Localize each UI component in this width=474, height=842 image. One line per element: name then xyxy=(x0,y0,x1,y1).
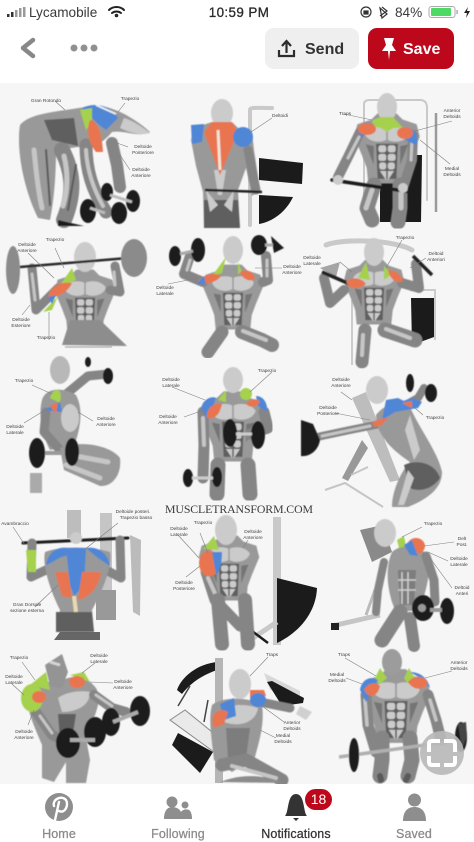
labels: Gran Dorsale xyxy=(13,602,42,608)
labels: Post. xyxy=(457,542,467,548)
labels: Trapezio xyxy=(424,521,443,527)
labels: Laterale xyxy=(156,291,174,297)
icon: cellular signal xyxy=(7,7,26,17)
labels: Deltoide xyxy=(332,377,350,383)
labels xyxy=(402,521,470,597)
labels: Anteriore xyxy=(158,420,178,426)
labels: Trapezio xyxy=(10,655,29,661)
labels: Esteriore xyxy=(11,323,31,329)
labels: Deltoids xyxy=(328,678,346,684)
labels: Posteriore xyxy=(132,150,154,156)
tab: home xyxy=(42,793,76,841)
machine xyxy=(320,241,435,365)
icon: pin xyxy=(382,38,396,60)
bench xyxy=(325,392,400,507)
labels: Trapezio xyxy=(37,335,56,341)
labels xyxy=(5,653,133,741)
label: Saved xyxy=(396,827,432,841)
exercise 9: incline rear raise xyxy=(301,374,445,507)
labels: Medial xyxy=(445,166,459,172)
labels: Deltoide xyxy=(12,317,30,323)
labels: Posteriore xyxy=(317,411,339,417)
clock: 10:59 PM xyxy=(209,5,269,20)
labels: Anteri xyxy=(456,591,468,597)
machine xyxy=(364,100,436,222)
labels: Delt xyxy=(458,536,467,542)
label: Deltoidi xyxy=(272,113,288,119)
labels: Trapezio xyxy=(258,368,277,374)
labels: Deltoide xyxy=(90,653,108,659)
labels: Medial xyxy=(330,672,344,678)
labels: Deltoide xyxy=(162,377,180,383)
icon: battery xyxy=(429,6,458,18)
labels: Anteriore xyxy=(113,685,133,691)
bottom navigation xyxy=(0,784,474,842)
exercise 13: dumbbell alternate raise xyxy=(5,653,150,783)
exercise 8: dumbbell front raise standing xyxy=(158,367,277,494)
icon: more dots xyxy=(70,44,98,52)
labels: Deltoids xyxy=(274,739,292,745)
label: Home xyxy=(42,827,76,841)
labels: Anteriore xyxy=(96,422,116,428)
icon: wifi xyxy=(109,7,124,16)
labels xyxy=(1,509,153,614)
labels: Traps xyxy=(338,652,351,658)
exercise 12: incline dumbbell raise xyxy=(331,519,470,646)
labels: Laterale xyxy=(5,680,23,686)
labels: Deltoids xyxy=(450,666,468,672)
labels: Deltoide xyxy=(15,729,33,735)
labels: Deltoide xyxy=(319,405,337,411)
notification badge: 18 xyxy=(311,791,326,807)
exercise 10: lat pulldown xyxy=(1,509,153,640)
bench xyxy=(331,525,392,630)
labels: Traps xyxy=(339,111,352,117)
tab: notifications xyxy=(261,789,332,841)
labels xyxy=(6,378,116,436)
icon: bell xyxy=(285,794,307,821)
labels: Anterior xyxy=(451,660,468,666)
send label: Send xyxy=(305,41,344,58)
labels: Anteriore xyxy=(14,735,34,741)
labels: Deltoids xyxy=(443,172,461,178)
icon: charging bolt xyxy=(464,7,470,18)
labels: Anterior xyxy=(444,108,461,114)
labels: Gran Rotondo xyxy=(31,98,61,104)
labels: Anteriore xyxy=(17,248,37,254)
labels: Trapezio xyxy=(15,378,34,384)
labels xyxy=(303,235,445,272)
labels xyxy=(328,652,468,684)
icon: pinterest xyxy=(45,793,73,821)
machine xyxy=(170,658,304,783)
labels: Trapezio xyxy=(121,96,140,102)
icon: rotation lock xyxy=(361,7,371,17)
labels: Traps xyxy=(266,652,279,658)
icon: bluetooth xyxy=(380,7,387,18)
labels: Deltoids xyxy=(443,114,461,120)
toolbar xyxy=(23,28,454,69)
exercise 11: cable raise xyxy=(170,515,317,645)
labels: Deltoide xyxy=(170,526,188,532)
machine xyxy=(250,108,303,225)
labels: Deltoide xyxy=(6,424,24,430)
labels: Deltoide posteri. xyxy=(116,509,150,515)
labels: Anteriore xyxy=(331,383,351,389)
labels: Deltoide xyxy=(450,556,468,562)
labels: Deltoide xyxy=(303,255,321,261)
labels: Trapezio xyxy=(194,520,213,526)
exercise 3: front raise with bar xyxy=(332,93,461,222)
labels: Anteriore xyxy=(131,173,151,179)
labels: Medial xyxy=(276,733,290,739)
labels: Deltoide xyxy=(132,167,150,173)
labels: Laterale xyxy=(162,383,180,389)
labels: Laterale xyxy=(450,562,468,568)
labels: Laterale xyxy=(303,261,321,267)
labels: Deltoide xyxy=(175,580,193,586)
labels: Deltoide xyxy=(156,285,174,291)
exercise 4: barbell behind-neck press xyxy=(6,237,147,347)
labels xyxy=(158,368,277,426)
battery percent: 84% xyxy=(395,5,422,20)
labels: Deltoide xyxy=(134,144,152,150)
labels: Deltoide xyxy=(97,416,115,422)
tab: following xyxy=(151,796,205,841)
labels: Anteriore xyxy=(282,270,302,276)
labels: sezione esterna xyxy=(10,608,44,614)
icon: visual search button xyxy=(420,731,464,775)
machine xyxy=(240,517,317,645)
exercise 6: machine shoulder press xyxy=(303,235,445,365)
labels xyxy=(339,108,461,178)
labels: Anterior xyxy=(284,720,301,726)
labels xyxy=(156,264,302,297)
labels: Deltoide xyxy=(114,679,132,685)
label: Notifications xyxy=(261,827,331,841)
labels: Anteriore xyxy=(243,535,263,541)
save button xyxy=(368,28,454,69)
site title: MUSCLETRANSFORM.COM xyxy=(165,502,314,516)
labels: Laterale xyxy=(170,532,188,538)
exercise 7: seated side raise xyxy=(6,356,120,493)
labels: Deltoid xyxy=(455,585,470,591)
exercise 2: cable rear view xyxy=(191,99,303,228)
labels xyxy=(11,237,65,341)
status bar xyxy=(7,5,470,20)
save label: Save xyxy=(403,41,440,58)
exercise 15: barbell upright row xyxy=(328,649,468,780)
labels: Laterale xyxy=(6,430,24,436)
labels: Deltoide xyxy=(159,414,177,420)
labels: Anteriori xyxy=(427,257,445,263)
label: Following xyxy=(151,827,205,841)
labels: Trapezio xyxy=(426,415,445,421)
labels: Deltoide xyxy=(283,264,301,270)
labels xyxy=(170,520,263,592)
labels: Deltoide xyxy=(244,529,262,535)
labels: Posteriore xyxy=(173,586,195,592)
labels: Trapezio basso xyxy=(120,515,153,521)
labels: Deltoide xyxy=(18,242,36,248)
send button xyxy=(265,28,359,69)
exercise 14: machine lateral raise xyxy=(170,652,312,783)
labels: Laterale xyxy=(90,659,108,665)
labels: Trapezio xyxy=(46,237,65,243)
labels xyxy=(250,652,301,745)
labels: Deltoids xyxy=(283,726,301,732)
icon: back chevron xyxy=(23,40,33,56)
icon: share xyxy=(279,41,294,56)
labels: Avambraccio xyxy=(1,521,29,527)
labels xyxy=(31,96,154,179)
labels xyxy=(317,377,445,421)
carrier name: Lycamobile xyxy=(29,5,97,20)
icon: people xyxy=(164,796,192,819)
tab: saved xyxy=(396,794,432,841)
labels: Deltoide xyxy=(5,674,23,680)
icon: person xyxy=(403,794,426,821)
labels: Trapezio xyxy=(396,235,415,241)
labels: Deltoid xyxy=(429,251,444,257)
exercise 1: bent-over rear raise xyxy=(19,96,154,226)
exercise 5: seated dumbbell press xyxy=(156,235,302,352)
machine xyxy=(54,510,141,640)
